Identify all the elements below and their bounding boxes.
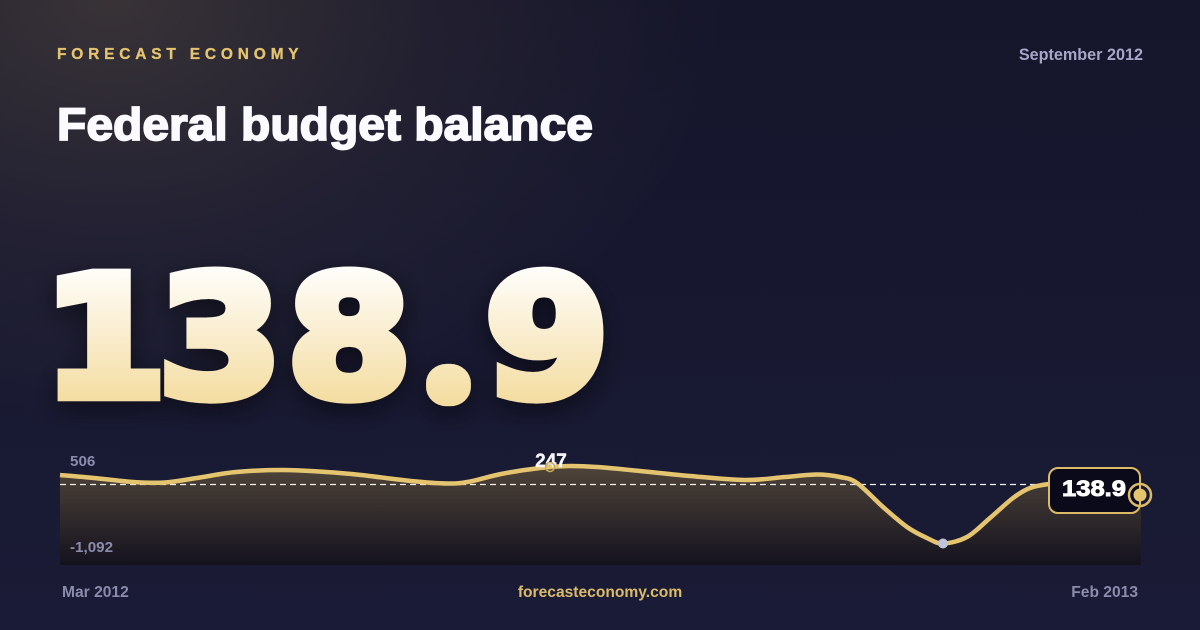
headline value: 138: [43, 241, 411, 435]
average dashed line: [60, 484, 1050, 486]
headline value: .: [444, 369, 453, 392]
end date label: Feb 2013: [1071, 584, 1138, 601]
area fill under line: [60, 466, 1141, 565]
current value callout: [1049, 468, 1140, 513]
title: Federal budget balance: [57, 99, 593, 150]
chart: federal budget balance trend: [60, 451, 1151, 565]
peak label: 247: [535, 451, 567, 472]
eyebrow: Forecast Economy: FORECAST ECONOMY: [57, 46, 303, 63]
headline value: 9: [485, 241, 609, 435]
current value marker: [1129, 484, 1151, 506]
start date label: Mar 2012: [62, 584, 129, 601]
low marker: [938, 538, 948, 548]
source link: forecasteconomy.com: [518, 584, 682, 601]
axis max label: 506: [70, 453, 95, 470]
peak marker: [546, 462, 554, 472]
current value callout: 138.9: [1062, 476, 1126, 501]
date: September 2012: [1019, 46, 1143, 64]
axis min label: -1,092: [70, 539, 113, 556]
trend line: [60, 466, 1060, 544]
